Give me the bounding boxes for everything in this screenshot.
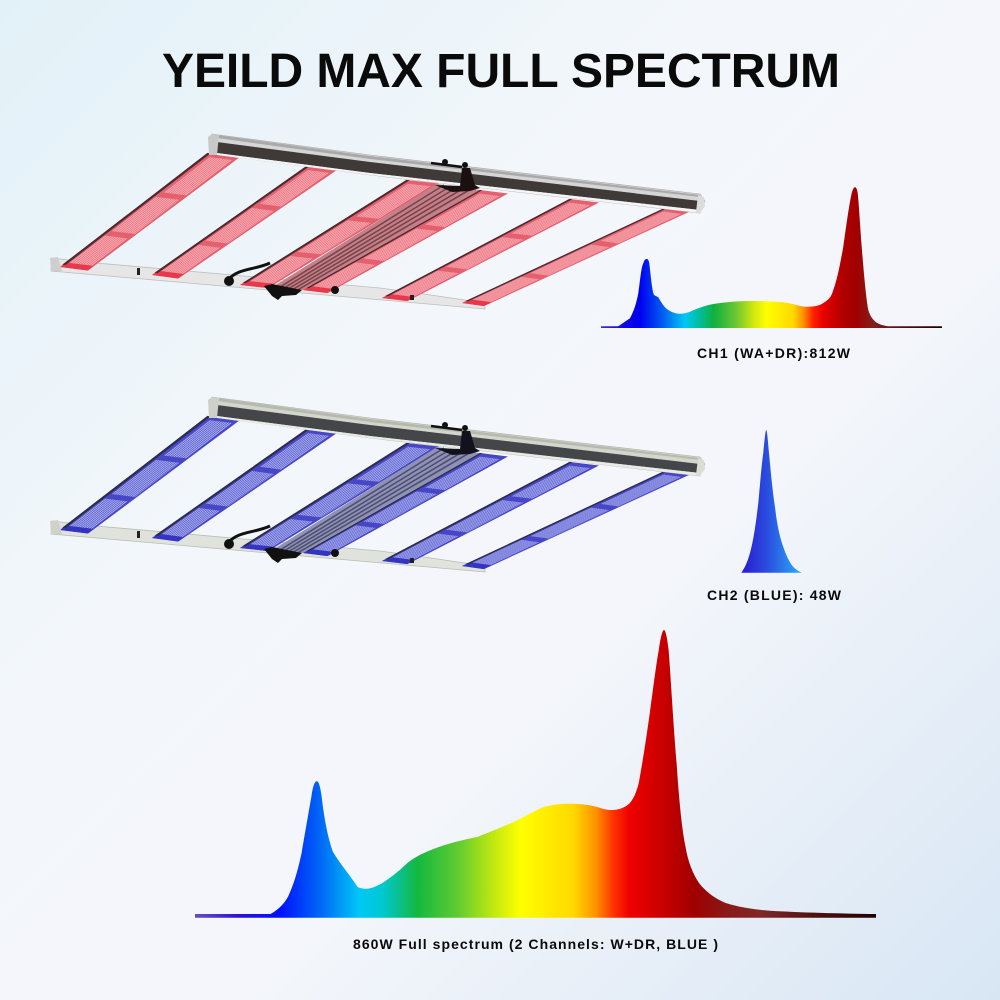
heat sink driver bbox=[271, 184, 480, 290]
rail end caps bbox=[50, 397, 705, 534]
grow light: blue channel bbox=[50, 397, 705, 572]
label: CH1: CH1 (WA+DR):812W bbox=[697, 345, 851, 361]
LED bars bbox=[59, 153, 690, 306]
rail end caps bbox=[50, 134, 705, 271]
top rail bbox=[212, 134, 705, 213]
spectrum chart: CH2 blue bbox=[741, 430, 802, 573]
cables and connectors bbox=[137, 263, 414, 300]
top rail bbox=[212, 397, 705, 476]
spectrum chart: CH1 bbox=[601, 187, 942, 328]
cables and connectors bbox=[137, 526, 414, 563]
bottom rail bbox=[51, 258, 485, 309]
hanging clamp bbox=[431, 159, 480, 192]
spectrum chart: full spectrum bbox=[195, 630, 876, 918]
label: full spectrum: 860W Full spectrum (2 Channels: W+DR, BLUE ) bbox=[353, 936, 718, 952]
heat sink driver bbox=[271, 447, 480, 553]
LED bars bbox=[59, 416, 690, 570]
title: YEILD MAX FULL SPECTRUM bbox=[162, 45, 840, 98]
hanging clamp bbox=[431, 422, 480, 455]
grow light: red channel bbox=[50, 134, 705, 309]
bottom rail bbox=[51, 521, 485, 572]
label: CH2: CH2 (BLUE): 48W bbox=[707, 587, 842, 603]
